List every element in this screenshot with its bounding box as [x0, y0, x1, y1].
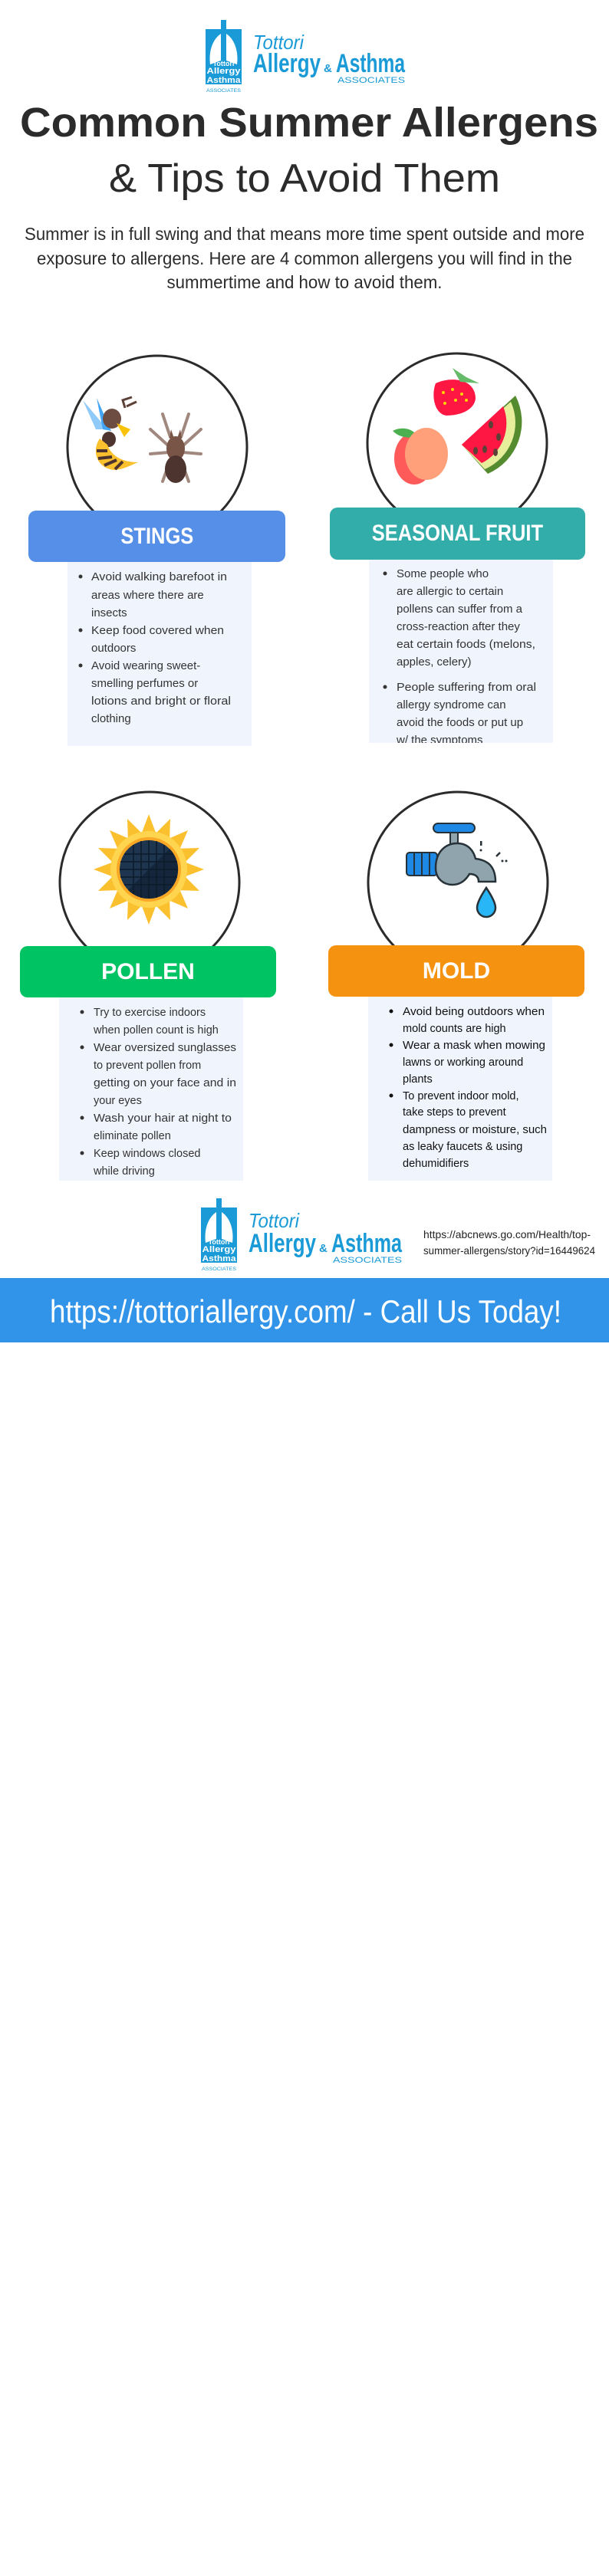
- label: SEASONAL FRUIT: [330, 508, 585, 560]
- text list: mold tips: dehumidifiers: [403, 1158, 469, 1170]
- text list: stings tips: outdoors: [91, 642, 136, 655]
- label: SEASONAL FRUIT: SEASONAL FRUIT: [372, 521, 543, 546]
- text list: stings tips: lotions and bright or floral: [91, 695, 231, 708]
- text list: mold tips: take steps to prevent: [403, 1106, 506, 1119]
- logo: footer: Tottori: [249, 1209, 300, 1232]
- text list: mold tips: [368, 997, 552, 1181]
- banner: call to action: [0, 1278, 609, 1342]
- text list: mold tips: mold counts are high: [403, 1023, 506, 1035]
- text list: fruit tips: allergy syndrome can: [397, 698, 506, 711]
- text list: pollen tips: when pollen count is high: [93, 1024, 219, 1037]
- text list: pollen tips: Keep windows closed: [94, 1148, 200, 1160]
- logo: top: Allergy: [253, 49, 321, 78]
- title: Common Summer Allergens: [20, 100, 598, 146]
- text list: fruit tips: cross-reaction after they: [397, 620, 520, 633]
- text list: mold tips: To prevent indoor mold,: [403, 1090, 519, 1102]
- text list: stings tips: smelling perfumes or: [91, 677, 198, 690]
- logo: top: ASSOCIATES: [206, 89, 241, 94]
- label: MOLD: MOLD: [423, 958, 490, 983]
- logo: top: Tottori: [253, 31, 304, 54]
- text list: fruit tips: Some people who: [397, 567, 489, 580]
- logo: footer: Allergy: [249, 1229, 316, 1258]
- icon: sunflower circle: [58, 791, 241, 946]
- text list: stings tips: areas where there are: [91, 589, 204, 602]
- text list: mold tips: lawns or working around: [403, 1056, 523, 1069]
- text list: mold tips: Avoid being outdoors when: [403, 1006, 545, 1018]
- label: POLLEN: POLLEN: [101, 958, 195, 984]
- text list: stings tips: clothing: [91, 712, 131, 725]
- label: STINGS: [28, 511, 285, 562]
- panel: stings: [28, 354, 285, 746]
- text list: pollen tips: eliminate pollen: [94, 1130, 171, 1142]
- text list: mold tips: dampness or moisture, such: [403, 1124, 547, 1136]
- text list: fruit tips: avoid the foods or put up: [397, 716, 523, 729]
- logo: footer: [201, 1198, 403, 1272]
- source citation: https://abcnews.go.com/Health/top-: [423, 1228, 591, 1240]
- text list: fruit tips: apples, celery): [397, 656, 472, 669]
- text list: stings tips: Keep food covered when: [91, 624, 224, 637]
- panel: pollen: [20, 791, 276, 1181]
- icon: wasp and spider circle: [66, 354, 249, 511]
- text list: fruit tips: pollens can suffer from a: [397, 603, 523, 616]
- text list: pollen tips: to prevent pollen from: [94, 1060, 201, 1072]
- logo: top: ASSOCIATES: [337, 76, 405, 85]
- label: POLLEN: [20, 946, 276, 997]
- source citation: [423, 1228, 595, 1257]
- logo: top: &: [324, 62, 332, 75]
- text list: fruit tips: eat certain foods (melons,: [397, 638, 535, 651]
- text list: fruit tips: are allergic to certain: [397, 585, 503, 598]
- text list: stings tips: Avoid walking barefoot in: [91, 570, 227, 583]
- text list: stings tips: Avoid wearing sweet-: [91, 659, 200, 672]
- text list: stings tips: insects: [91, 606, 127, 619]
- text list: pollen tips: Try to exercise indoors: [94, 1007, 206, 1019]
- intro paragraph: Summer is in full swing and that means more time spent outside and more: [25, 224, 584, 244]
- text list: fruit tips: [369, 560, 553, 743]
- label: STINGS: STINGS: [120, 523, 193, 549]
- logo: top: Allergy: [207, 67, 242, 76]
- text list: pollen tips: while driving: [93, 1165, 155, 1178]
- label: MOLD: [328, 945, 584, 997]
- logo: footer: ASSOCIATES: [333, 1256, 402, 1265]
- logo: footer: &: [319, 1242, 328, 1255]
- text list: mold tips: as leaky faucets & using: [403, 1141, 522, 1153]
- intro paragraph: [25, 224, 584, 291]
- text list: pollen tips: Wash your hair at night to: [94, 1112, 232, 1125]
- logo: footer: Tottori: [209, 1238, 229, 1246]
- text list: fruit tips: People suffering from oral: [397, 681, 536, 694]
- source citation: summer-allergens/story?id=16449624: [423, 1244, 595, 1257]
- text list: mold tips: Wear a mask when mowing: [403, 1040, 545, 1052]
- logo: footer: ASSOCIATES: [202, 1267, 236, 1272]
- panel: mold: [328, 791, 584, 1181]
- logo: top: Tottori: [213, 60, 234, 67]
- text list: pollen tips: getting on your face and in: [94, 1077, 236, 1089]
- icon: fruit circle: [367, 353, 548, 508]
- text list: pollen tips: your eyes: [94, 1095, 142, 1107]
- logo: footer: Asthma: [202, 1254, 236, 1263]
- logo: top: Asthma: [207, 76, 241, 85]
- text list: stings tips: [67, 562, 252, 746]
- panel: seasonal fruit: [330, 353, 585, 743]
- subtitle: & Tips to Avoid Them: [109, 156, 500, 201]
- intro paragraph: exposure to allergens. Here are 4 common allergens you will find in the: [37, 248, 572, 268]
- logo: footer: Allergy: [202, 1245, 237, 1254]
- text list: pollen tips: Wear oversized sunglasses: [94, 1042, 236, 1054]
- text list: pollen tips: [59, 997, 243, 1181]
- logo: top: [206, 20, 406, 94]
- icon: dripping faucet circle: [367, 791, 549, 945]
- text list: mold tips: plants: [403, 1073, 433, 1086]
